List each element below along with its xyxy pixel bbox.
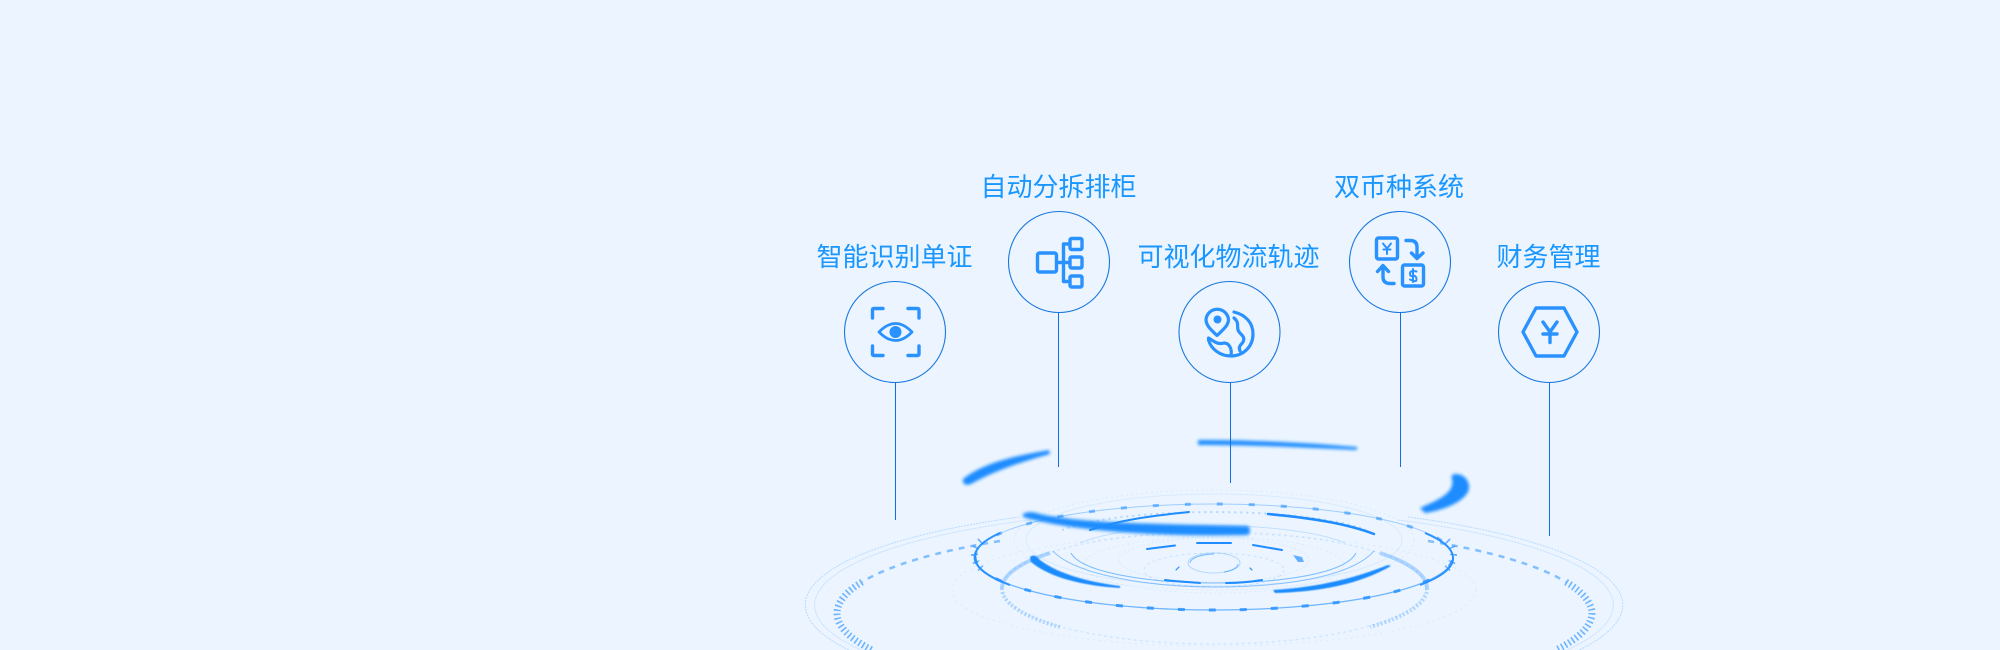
faint halo rings: [952, 490, 1476, 646]
connector line: [894, 382, 896, 520]
label: 双币种系统: [1334, 172, 1464, 202]
item: 可视化物流轨迹: [1137, 242, 1320, 483]
connector line: [1400, 312, 1402, 467]
item: 自动分拆排柜: [980, 172, 1137, 467]
item: 财务管理: [1496, 242, 1601, 536]
light ring: [1002, 532, 1427, 644]
connector line: [1230, 382, 1232, 483]
brush stroke top: [1198, 440, 1357, 450]
circle: [844, 282, 946, 382]
brush stroke left: [963, 450, 1050, 485]
inner dashes and arcs: [1090, 512, 1374, 583]
brush stroke right: [1420, 474, 1469, 513]
label: 财务管理: [1496, 242, 1601, 272]
thick arc lower left: [1030, 556, 1120, 588]
icon: yen hexagon: [1523, 308, 1577, 356]
connector line: [1058, 312, 1060, 467]
icon: globe pin: [1206, 309, 1253, 356]
circle: [1350, 212, 1450, 312]
item: 双币种系统: [1334, 172, 1464, 467]
circle: [1498, 282, 1600, 382]
thick arc lower right: [1273, 565, 1391, 593]
label: 智能识别单证: [816, 242, 973, 272]
circle: [1008, 212, 1110, 312]
connector line: [1548, 382, 1550, 536]
label: 可视化物流轨迹: [1137, 242, 1320, 272]
dotted main ring: [974, 504, 1454, 610]
tick ring: [837, 541, 1592, 650]
outer pale ring: [805, 517, 1623, 650]
label: 自动分拆排柜: [980, 172, 1137, 202]
inner rings: [1053, 512, 1374, 587]
icon: eye scan: [872, 308, 919, 356]
brush stroke centre: [1023, 512, 1250, 535]
icon: currency exchange: [1376, 238, 1424, 286]
radar rings graphic: [805, 490, 1623, 650]
circle: [1179, 282, 1280, 382]
icon: hierarchy: [1038, 238, 1082, 287]
inner wedge mark: [1293, 555, 1304, 562]
item: 智能识别单证: [816, 242, 973, 520]
